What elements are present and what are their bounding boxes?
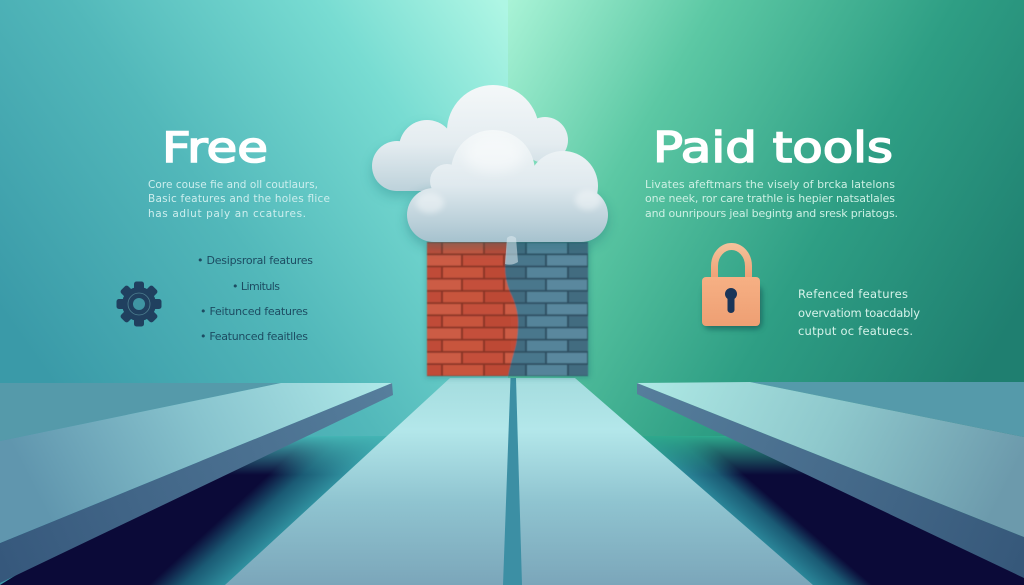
shadow under left slab [0, 436, 392, 585]
panel: left slab [0, 383, 393, 583]
panel: central walkway [225, 378, 813, 585]
text block: paid features [798, 287, 920, 338]
text block: free description [148, 179, 330, 220]
icon: gear [116, 282, 162, 326]
text block: paid features: cutput oc featuecs. [798, 324, 913, 338]
icon: padlock [702, 246, 762, 329]
background: free side [0, 0, 508, 585]
text block: paid features: Refenced features [798, 287, 908, 301]
list: free features: • Featunced feaitlles [200, 330, 308, 343]
list: free features: • Feitunced features [200, 305, 308, 318]
panel: back ledge right [750, 382, 1024, 437]
text block: paid description: Livates afeftmars the visely of brcka latelons [645, 178, 895, 191]
text block: free description: has adlut paly an ccatures. [148, 208, 306, 220]
text block: paid description [645, 178, 898, 220]
illustration: brick wall [426, 242, 590, 378]
panel: back ledge left [0, 383, 281, 441]
list: free features: • Limituls [232, 280, 280, 293]
title: Paid tools: Paid tools [653, 123, 893, 172]
list: free features: • Desipsroral features [197, 254, 313, 267]
panel: right slab [637, 382, 1024, 578]
illustration: back cloud [372, 85, 568, 197]
title: Free: Free [162, 123, 268, 172]
text block: free description: Basic features and the holes flice [148, 193, 330, 205]
text block: paid description: and ounripours jeal begintg and sresk priatogs. [645, 207, 898, 220]
shadow under right slab [640, 436, 1024, 585]
illustration: front cloud [407, 130, 608, 247]
list: free features [197, 254, 313, 343]
background: paid side [508, 0, 1024, 585]
illustration: cloud drip [505, 236, 518, 265]
text block: paid features: overvatiom toacdably [798, 306, 920, 320]
text block: paid description: one neek, ror care trathle is hepier natsatlales [645, 192, 895, 205]
text block: free description: Core couse fie and oll coutlaurs, [148, 179, 318, 191]
